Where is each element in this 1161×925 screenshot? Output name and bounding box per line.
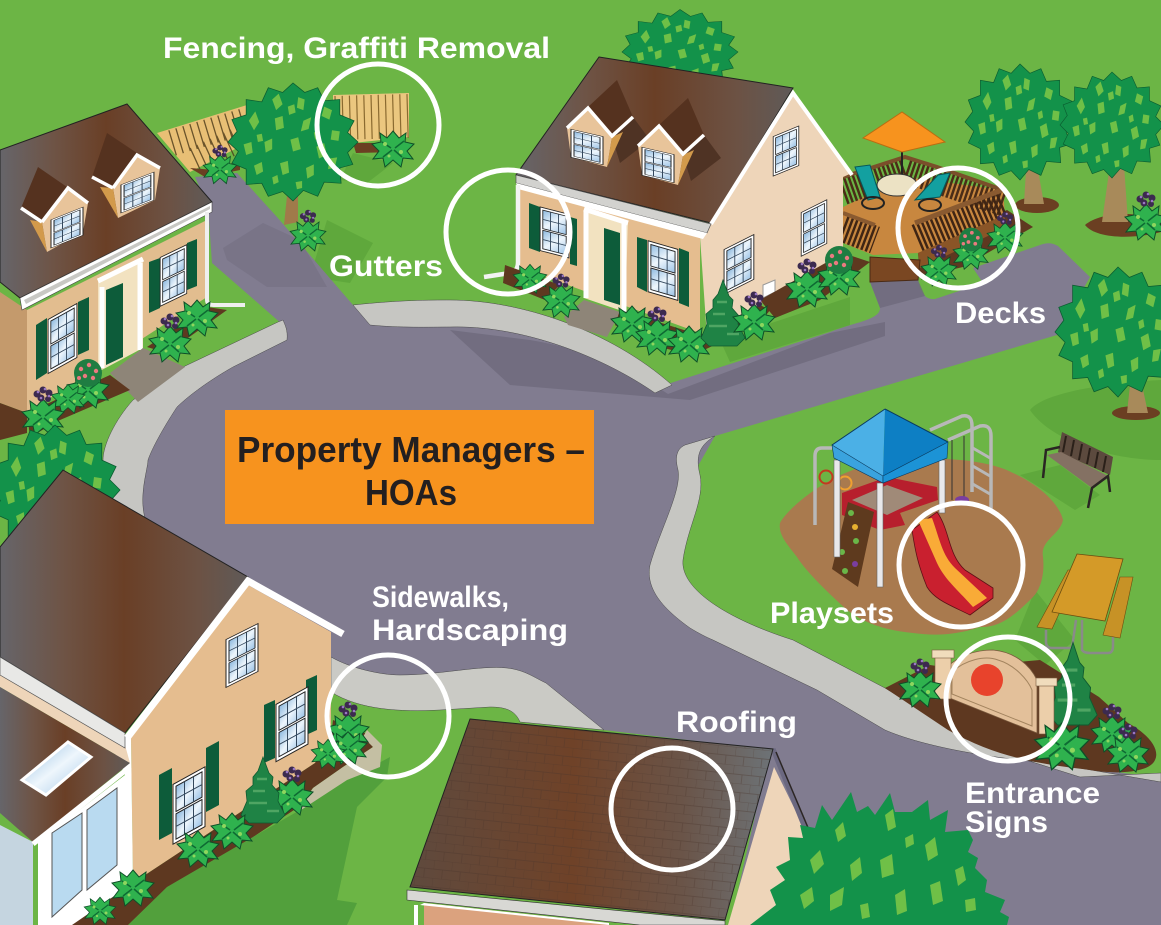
main roof — [0, 470, 248, 733]
canopy — [832, 409, 948, 483]
roof — [410, 719, 773, 920]
slide — [912, 512, 993, 615]
circle: fencing — [317, 64, 439, 186]
fence: right section — [333, 93, 409, 153]
label: signs: Signs — [965, 806, 1048, 839]
house: bottom left — [0, 470, 343, 925]
highlight circles — [317, 64, 1070, 870]
tree: bottom center — [750, 792, 1009, 925]
small wall — [0, 825, 33, 925]
road network — [120, 173, 1161, 925]
gable wall — [728, 767, 805, 925]
rake trim — [127, 581, 343, 738]
sidewalk: hardscaping path — [331, 657, 604, 730]
deck — [843, 112, 1033, 282]
chair right — [915, 173, 950, 211]
bed — [885, 660, 1156, 772]
steps — [564, 300, 620, 337]
steps — [110, 348, 185, 402]
road shadows — [223, 223, 925, 400]
gutter — [407, 890, 725, 925]
house: bottom center — [407, 719, 809, 925]
gable windows — [773, 126, 799, 176]
label: playsets: Playsets — [770, 597, 894, 630]
sign panel — [947, 650, 1037, 733]
platform — [842, 477, 938, 530]
dormer left — [21, 167, 88, 252]
lawn shadows — [310, 153, 1161, 665]
shrub: fence bed — [190, 131, 414, 184]
lawn shadow — [128, 757, 390, 925]
base bed — [0, 403, 27, 440]
dormer right — [92, 133, 160, 218]
glass doors — [52, 813, 82, 917]
wall corner — [38, 720, 133, 925]
sidewalks — [103, 300, 1161, 782]
front wall — [27, 220, 207, 413]
labels — [163, 32, 1100, 839]
table — [877, 174, 917, 196]
rake — [773, 749, 805, 828]
gable wall — [700, 93, 852, 337]
deck floor — [843, 177, 1005, 255]
house: top center — [484, 57, 852, 337]
climbing wall — [832, 502, 874, 587]
umbrella — [863, 112, 945, 182]
front shutters — [529, 203, 689, 307]
downspout — [207, 212, 245, 305]
sidewalk: upper curve — [353, 300, 672, 393]
title text: Property Managers – — [237, 429, 585, 470]
rake trim — [711, 93, 852, 224]
label: decks: Decks — [955, 297, 1046, 330]
monkey bars — [815, 416, 991, 525]
playground — [780, 409, 1063, 635]
evergreen — [1049, 642, 1097, 725]
circle: decks — [898, 168, 1018, 288]
circle: sidewalks — [327, 655, 449, 777]
label: sidewalks: Sidewalks, — [372, 581, 509, 614]
shrub: by road — [290, 210, 326, 251]
door surround — [584, 209, 628, 312]
gutter — [516, 175, 711, 233]
circle: entrance signs — [946, 637, 1070, 761]
gutter — [0, 657, 125, 748]
sidewalk: right curve — [649, 436, 1161, 782]
tree: top center — [622, 9, 738, 94]
mulch area — [780, 459, 1063, 635]
porch post — [414, 905, 418, 925]
steps — [870, 257, 920, 282]
rings — [820, 436, 964, 500]
chair left — [855, 165, 884, 209]
gable window — [226, 624, 258, 687]
front railing — [917, 202, 1003, 238]
front wall — [518, 183, 700, 333]
lower roof — [0, 687, 130, 842]
roof — [0, 104, 212, 298]
plants — [899, 658, 941, 707]
side wall — [0, 292, 27, 413]
circle: gutters — [446, 170, 570, 294]
title box — [225, 410, 594, 524]
windows — [276, 687, 308, 762]
entrance sign area — [885, 642, 1156, 772]
deck bed — [918, 210, 1033, 277]
brick wall — [424, 903, 609, 925]
tree: top right pair — [965, 64, 1161, 237]
circle: playsets — [899, 503, 1023, 627]
picnic table — [1037, 554, 1133, 653]
fence: left section — [157, 105, 247, 172]
cream band — [0, 672, 130, 763]
posts — [935, 655, 951, 699]
red logo dot — [971, 664, 1003, 696]
sidewalk: left curve — [103, 320, 287, 530]
label: entrance: Entrance — [965, 777, 1100, 810]
deck fascia — [918, 215, 1005, 268]
label: hardscaping: Hardscaping — [372, 614, 568, 647]
shutters — [36, 239, 197, 380]
shrub: far right — [1125, 192, 1161, 240]
fascia — [20, 202, 212, 310]
gable wall — [131, 585, 331, 883]
beds: house 2 — [503, 212, 1023, 362]
label: fencing: Fencing, Graffiti Removal — [163, 32, 550, 65]
dormer two — [638, 98, 721, 185]
vent — [763, 280, 775, 298]
shutters — [159, 675, 317, 840]
house: top left — [0, 104, 245, 440]
dormer one — [567, 80, 650, 167]
tree: lower left behind house — [0, 425, 120, 555]
back railing — [843, 170, 1003, 203]
posts — [834, 460, 945, 587]
downspout — [484, 185, 518, 277]
fence — [157, 93, 409, 172]
title box: HOAs — [365, 472, 457, 513]
bed and wall: bottom left house — [72, 702, 382, 925]
swing seat — [955, 496, 969, 504]
bench — [1043, 432, 1113, 508]
circle: roofing — [611, 748, 733, 870]
tree: fence side — [228, 83, 358, 225]
label: roofing: Roofing — [676, 706, 797, 739]
door — [98, 258, 143, 372]
roof — [516, 57, 793, 223]
tree: right lawn — [1055, 267, 1161, 420]
label: gutters: Gutters — [329, 250, 443, 283]
windows — [48, 303, 77, 374]
front windows — [540, 207, 569, 258]
bed: top left house — [22, 300, 227, 437]
skylight — [22, 742, 91, 795]
